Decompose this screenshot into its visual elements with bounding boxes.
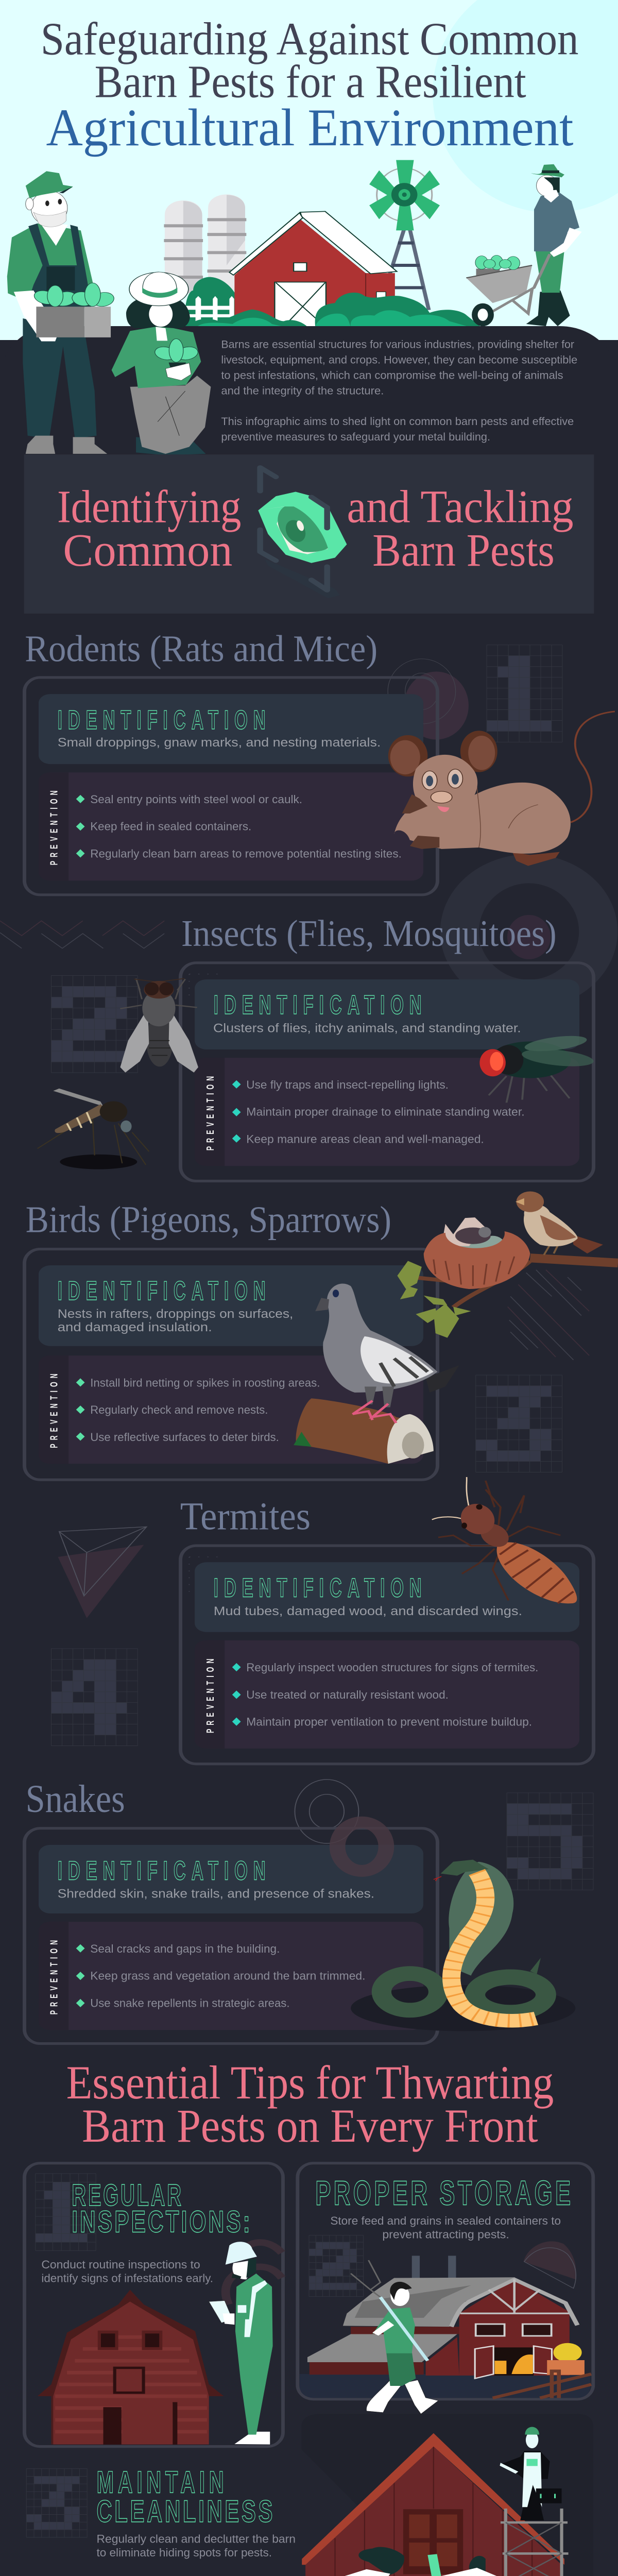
prevention box: Use fly traps and insect-repelling lights. (246, 1079, 449, 1091)
identification box: Mud tubes, damaged wood, and discarded wings. (214, 1604, 522, 1618)
decor: triangle (58, 1527, 147, 1618)
identification box (39, 694, 423, 764)
section heading: snakes: Snakes (26, 1777, 125, 1821)
prevention box (195, 1058, 579, 1166)
block: maintain cleanliness: to eliminate hiding spots for pests. (96, 2547, 272, 2559)
prevention box: Keep manure areas clean and well-managed. (246, 1133, 484, 1145)
banner heading left: Common (63, 524, 233, 575)
illustration: green fly (479, 1033, 595, 1103)
identification box: IDENTIFICATION (58, 705, 271, 735)
block: maintain cleanliness: MAINTAIN (96, 2465, 228, 2500)
banner heading left: Identifying (57, 481, 241, 532)
prevention box: PREVENTION (204, 1073, 216, 1150)
heading: essential tips (66, 2057, 554, 2153)
intro text: and the integrity of the structure. (221, 385, 384, 397)
section heading: termites: Termites (180, 1495, 311, 1538)
scaffold (496, 2509, 572, 2576)
illustration: rat (388, 711, 615, 866)
prevention box: Maintain proper drainage to eliminate standing water. (246, 1106, 525, 1118)
back bushes (185, 277, 236, 327)
identification box: Shredded skin, snake trails, and presence of snakes. (58, 1887, 374, 1901)
prevention box (39, 772, 423, 880)
red barn (229, 211, 397, 328)
barn (300, 2433, 564, 2576)
intro text (221, 338, 577, 443)
pixel number 5 (507, 1793, 593, 1890)
prevention box (39, 1355, 423, 1464)
prevention box (39, 1922, 423, 2030)
heading: regular inspections: INSPECTIONS: (72, 2205, 252, 2239)
block: maintain cleanliness: CLEANLINESS (96, 2495, 275, 2529)
pixel number 4 (51, 1649, 138, 1745)
identification box: and damaged insulation. (58, 1320, 212, 1334)
prevention box: PREVENTION (48, 1370, 60, 1448)
decorative sky circle (433, 0, 618, 213)
illustration: housefly (120, 978, 198, 1073)
illustration backdrop and barn with cleaners on scaffold (300, 2414, 593, 2576)
decor: rings near snakes (295, 1780, 358, 1843)
decor: zigzag lines (0, 921, 164, 948)
identification box (195, 979, 579, 1049)
panel: insects card (181, 963, 594, 1181)
decor: half disc (523, 2241, 576, 2289)
prevention box: Regularly check and remove nests. (90, 1404, 268, 1416)
text block: identify signs of infestations early. (41, 2273, 213, 2285)
identification box: IDENTIFICATION (58, 1856, 271, 1886)
banner heading right (347, 481, 574, 575)
prevention box: PREVENTION (48, 1937, 60, 2014)
identification box: Nests in rafters, droppings on surfaces, (58, 1307, 293, 1321)
prevention box: Maintain proper ventilation to prevent moisture buildup. (246, 1716, 532, 1728)
panel: rodents card (24, 677, 437, 895)
banner panel: identifying and tackling (24, 454, 594, 614)
identification box: Clusters of flies, itchy animals, and standing water. (213, 1021, 521, 1036)
identification box (39, 1845, 423, 1913)
prevention box: Keep feed in sealed containers. (90, 821, 251, 833)
pixel number 3 (476, 1375, 562, 1472)
decor arcs (226, 2243, 282, 2304)
panel: proper storage (298, 2163, 593, 2414)
illustration: inspector with clipboard (209, 2242, 273, 2445)
prevention box: Seal entry points with steel wool or caulk. (90, 793, 302, 806)
prevention box: Regularly inspect wooden structures for signs of termites. (246, 1662, 538, 1674)
prevention box: Install bird netting or spikes in roosting areas. (90, 1377, 320, 1389)
banner heading left (57, 481, 241, 575)
illustration: termite (432, 1477, 577, 1603)
illustration: old farmer with plant box (7, 171, 117, 454)
prevention box: Use treated or naturally resistant wood. (246, 1689, 449, 1701)
identification box (39, 1265, 423, 1346)
decor: large ring (459, 869, 598, 994)
illustration: pigeon on log (315, 1283, 459, 1408)
panel: regular inspections (24, 2163, 283, 2447)
pixel number 3 (26, 2469, 87, 2537)
illustration: barn with hay (300, 2256, 591, 2398)
decor: diagonal rain lines (508, 1270, 589, 1360)
front bushes (189, 293, 481, 327)
prevention box: PREVENTION (48, 787, 60, 865)
leaves (397, 1261, 471, 1338)
illustration: farmer with pitchfork (351, 2260, 438, 2414)
panel: termites card (181, 1546, 594, 1764)
text block: Conduct routine inspections to (41, 2259, 200, 2271)
background: light sky header (0, 0, 618, 340)
illustration: mosquito (38, 1089, 149, 1169)
identification box (195, 1562, 579, 1632)
pixel number 2 (309, 2235, 364, 2297)
white fence (185, 296, 234, 321)
prevention box: PREVENTION (204, 1655, 216, 1733)
prevention box: Use reflective surfaces to deter birds. (90, 1431, 279, 1444)
text block: prevent attracting pests. (382, 2229, 509, 2241)
section heading: rodents: Rodents (Rats and Mice) (25, 628, 377, 669)
windmill (369, 160, 440, 310)
illustration: red barn (38, 2290, 224, 2445)
panel: snakes card (24, 1828, 437, 2044)
text block (41, 2259, 213, 2285)
icon: eye (258, 467, 347, 598)
illustration: nest with branch and sparrow (397, 1192, 618, 1338)
prevention box: Keep grass and vegetation around the barn trimmed. (90, 1970, 365, 1982)
farm scene: silos, barn, windmill, bushes (164, 160, 481, 328)
block: maintain cleanliness: Regularly clean and declutter the barn (96, 2533, 296, 2546)
heading: regular inspections (72, 2178, 252, 2239)
prevention box: Regularly clean barn areas to remove potential nesting sites. (90, 848, 402, 860)
worker on scaffold (500, 2427, 562, 2520)
title (41, 13, 578, 157)
man painting (441, 2556, 497, 2576)
decor: rings behind rodent card (388, 659, 469, 739)
identification box: IDENTIFICATION (58, 1276, 271, 1306)
woman with mop (324, 2547, 441, 2576)
illustration: woman in hat holding plant (112, 272, 211, 455)
pixel number 1 (487, 645, 562, 742)
prevention box: Seal cracks and gaps in the building. (90, 1943, 280, 1955)
pixel number 1 (36, 2174, 96, 2251)
section heading: birds: Birds (Pigeons, Sparrows) (26, 1198, 391, 1241)
heading: regular inspections: REGULAR (72, 2178, 183, 2212)
panel: birds card (24, 1249, 437, 1480)
prevention box: Use snake repellents in strategic areas. (90, 1997, 289, 2010)
text block (330, 2215, 561, 2241)
decor: pink ring over snakes card (337, 1822, 386, 1871)
pixel number 2 (51, 976, 138, 1073)
intro text: preventive measures to safeguard your metal building. (221, 431, 490, 443)
prevention box (195, 1640, 579, 1749)
log (294, 1398, 434, 1464)
identification box: Small droppings, gnaw marks, and nesting materials. (58, 736, 381, 750)
silos (164, 194, 246, 293)
illustration: farmer with wheelbarrow (466, 164, 582, 326)
block: maintain cleanliness (96, 2465, 296, 2559)
illustration: cobra (351, 1860, 575, 2031)
